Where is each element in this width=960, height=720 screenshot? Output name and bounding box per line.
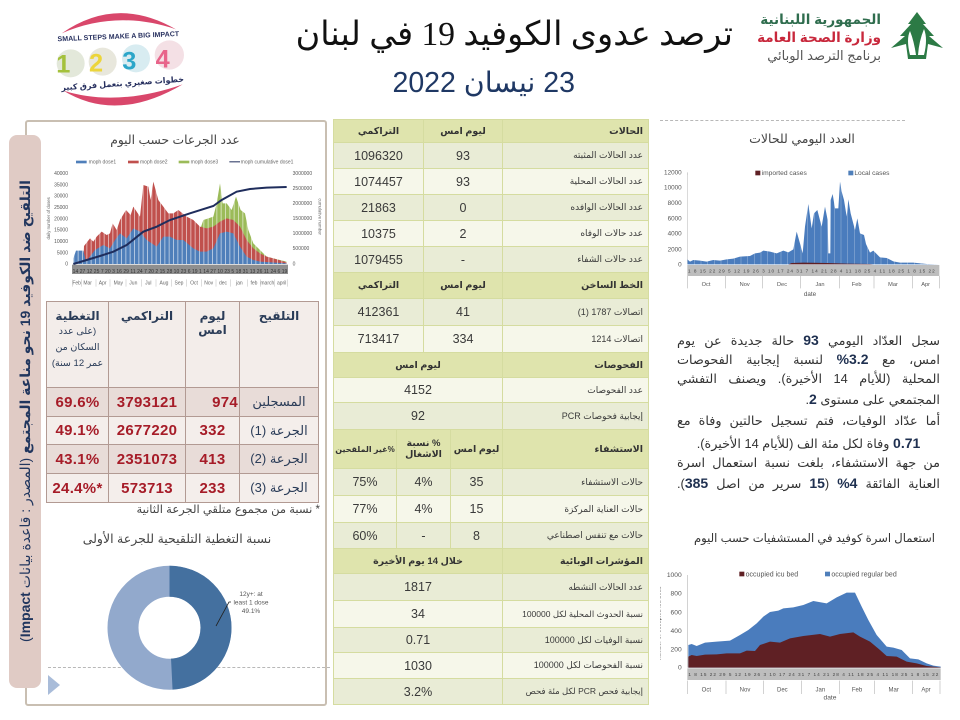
- chart: daily vaccine doses: daily number of doses: [46, 197, 51, 240]
- chart: first dose donut: 49.1%: [242, 608, 260, 615]
- paragraph lines: المجتمعي على مستوى 2.: [805, 391, 940, 407]
- table: indicators: الخط الساخن: [581, 280, 643, 291]
- chart: daily vaccine doses: 0: [65, 262, 68, 268]
- table: vaccination: 573713: [121, 480, 173, 496]
- chart: daily cases: [664, 169, 940, 298]
- table: indicators: ليوم امس: [454, 444, 499, 454]
- chart: first dose donut: [108, 566, 269, 690]
- table: indicators: ليوم امس: [440, 126, 486, 136]
- chart: daily vaccine doses: Sep: [175, 280, 184, 286]
- table: indicators: 35: [470, 475, 483, 489]
- table: indicators: 1030: [404, 658, 432, 672]
- chart: daily vaccine doses: march: [260, 280, 274, 286]
- table: indicators: 4%: [414, 475, 433, 489]
- table: indicators: 34: [411, 607, 425, 621]
- table: indicators: الاستشفاء: [595, 444, 643, 454]
- chart: occupied beds: 1 8 15 22 29 5 12 19 26 3 10 17 24 31 7 14 21 28 4 11 18 25 4 11 18 25 1 8 15 22: [688, 672, 939, 677]
- table: vaccination: التلقيح: [259, 309, 299, 323]
- chart: daily vaccine doses: cumulative number: [317, 198, 322, 236]
- logo: small steps campaign: 4: [156, 46, 170, 74]
- heading: daily cases: العدد اليومي للحالات: [749, 132, 855, 146]
- chart: daily cases: Dec: [777, 282, 787, 288]
- chart: daily vaccine doses: 20000: [54, 216, 68, 222]
- table: indicators: -: [421, 528, 426, 542]
- chart: daily cases: Apr: [921, 282, 930, 288]
- table: vaccination: الجرعة (3): [250, 480, 308, 495]
- chart: daily cases: 1 8 15 22 29 5 12 19 26 3 10 17 24 31 7 14 21 28 4 11 18 25 4 11 18 25 1 8 15 22: [688, 269, 935, 274]
- chart: daily vaccine doses: Nov: [204, 280, 214, 286]
- table: indicators: نسبة الوفيات لكل 100000: [545, 634, 643, 644]
- table: indicators: اتصالات 1787 (1): [578, 306, 643, 316]
- chart: daily vaccine doses: 35000: [54, 182, 68, 188]
- chart: daily vaccine doses: feb: [251, 280, 258, 286]
- footnote: * نسبة من مجموع متلقي الجرعة الثانية: [136, 504, 320, 516]
- chart: daily cases: 8000: [668, 200, 682, 207]
- table: vaccination: 3793121: [117, 394, 177, 410]
- chart: occupied beds: 1000: [667, 572, 682, 579]
- chart: occupied beds: Nov: [740, 687, 750, 693]
- chart: daily cases: 4000: [668, 231, 682, 238]
- table: vaccination: 233: [200, 480, 225, 496]
- table: indicators: 93: [456, 148, 470, 162]
- paragraph lines: امس، مع 3.2% لنسبة إيجابية الفحوصات: [677, 351, 940, 367]
- chart: occupied beds: Jan: [815, 687, 825, 693]
- table: indicators: 1079455: [354, 252, 403, 266]
- chart: occupied beds: [660, 571, 941, 701]
- table: indicators: 2: [460, 226, 466, 240]
- chart: daily vaccine doses: 10000: [54, 239, 68, 245]
- chart: daily vaccine doses: Aug: [160, 280, 169, 286]
- table: indicators: حالات مع تنفس اصطناعي: [547, 530, 643, 540]
- table: vaccination: 332: [200, 422, 225, 439]
- chart: daily cases: 6000: [668, 215, 682, 222]
- chart: daily vaccine doses: 0: [293, 262, 296, 268]
- table: indicators: 75%: [352, 475, 378, 489]
- table: vaccination: 49.1%: [55, 422, 100, 439]
- chart: daily vaccine doses: moph dose2: [140, 160, 168, 166]
- chart: daily vaccine doses: 30000: [54, 194, 68, 200]
- sidebar vertical heading: التلقيح ضد الكوفيد 19 نحو مناعة المجتمع (المصدر : قاعدة بيانات Impact ): [17, 180, 33, 642]
- table: indicators: 41: [456, 305, 470, 319]
- paragraph lines: أما عدّاد الوفيات، فتم تسجيل حالتين وفاة مع: [677, 413, 940, 428]
- heading: first dose coverage: نسبة التغطية التلقيحية للجرعة الأولى: [83, 532, 271, 546]
- chart: occupied beds: Dec: [777, 687, 788, 693]
- table: vaccination: التغطية: [55, 309, 100, 323]
- table: indicators: 93: [456, 174, 470, 188]
- chart: occupied beds: occupied regular bed: [831, 571, 897, 578]
- table: indicators: حالات العناية المركزة: [564, 504, 643, 514]
- table: indicators: 0.71: [406, 633, 430, 647]
- table: indicators: عدد الحالات المحلية: [570, 176, 643, 186]
- table: vaccination: 413: [200, 450, 225, 468]
- chart: daily vaccine doses: 500000: [293, 246, 310, 252]
- table: indicators: الحالات: [609, 126, 643, 136]
- chart: occupied beds: Oct: [702, 687, 711, 693]
- logo: ministry of public health: برنامج الترصد الوبائي: [767, 48, 881, 63]
- table: indicators: اتصالات 1214: [591, 334, 643, 344]
- chart: occupied beds: 0: [678, 665, 682, 672]
- table: indicators: الفحوصات: [594, 360, 643, 370]
- table: indicators: 4%: [414, 502, 433, 516]
- table: indicators: عدد الحالات النشطه: [568, 582, 643, 592]
- table: indicators: ليوم امس: [395, 360, 441, 370]
- chart: daily vaccine doses: 2500000: [293, 186, 312, 192]
- table: indicators: 1096320: [354, 148, 403, 162]
- heading: covid bed use: استعمال اسرة كوفيد في المستشفيات حسب اليوم: [694, 532, 935, 545]
- chart: first dose donut: 12y+: at: [239, 591, 263, 598]
- table: indicators: نسبة الفحوصات لكل 100000: [534, 660, 643, 670]
- table: indicators: 0: [460, 200, 466, 214]
- table: indicators: عدد الحالات الوافده: [570, 202, 643, 212]
- table: indicators: حالات الاستشفاء: [581, 476, 643, 486]
- panel: vaccination sidebar: [9, 135, 41, 688]
- chart: daily cases: imported cases: [762, 170, 807, 177]
- chart: daily vaccine doses: jan: [235, 280, 243, 286]
- logo: small steps campaign: 3: [122, 47, 136, 75]
- date subtitle: 23 نيسان 2022: [392, 67, 575, 99]
- table: indicators: التراكمي: [358, 126, 399, 136]
- table: vaccination: 43.1%: [55, 450, 100, 468]
- table: vaccination: 24.4%*: [52, 480, 103, 496]
- chart: daily vaccine doses: april: [277, 280, 286, 286]
- table: indicators: 15: [470, 502, 483, 516]
- table: indicators: 1074457: [354, 174, 403, 188]
- chart: daily cases: Nov: [740, 282, 750, 288]
- chart: daily vaccine doses: 1000000: [293, 231, 312, 237]
- chart: daily vaccine doses: 1500000: [293, 216, 312, 222]
- table: vaccination: 974: [212, 394, 238, 410]
- chart: daily vaccine doses: Oct: [190, 280, 198, 286]
- chart: daily vaccine doses: 5000: [57, 250, 68, 256]
- chart: daily vaccine doses: [46, 160, 322, 287]
- chart: daily vaccine doses: 3000000: [293, 171, 312, 177]
- table: indicators: % نسبة الاشغال: [405, 438, 442, 460]
- chart: first dose donut: least 1 dose: [233, 600, 269, 606]
- table: indicators: عدد حالات الشفاء: [577, 254, 643, 264]
- chart: daily vaccine doses: dec: [219, 280, 228, 286]
- chart: occupied beds: 400: [671, 628, 682, 635]
- table: indicators: نسبة الحدوث المحلية لكل 100000: [522, 608, 643, 618]
- chart: daily vaccine doses: moph cumulative dose1: [241, 160, 294, 166]
- logo: small steps campaign: [56, 13, 185, 106]
- logo: ministry of public health: وزارة الصحة العامة: [757, 30, 881, 45]
- chart: daily vaccine doses: moph dose3: [191, 160, 218, 166]
- chart: daily vaccine doses: Mar: [83, 280, 92, 286]
- chart: occupied beds: Apr: [921, 687, 931, 693]
- logo: small steps campaign: 2: [89, 50, 103, 78]
- table: vaccination: الجرعة (2): [250, 451, 308, 466]
- dashed divider top: [660, 120, 905, 121]
- chart: daily cases: date: [804, 291, 817, 298]
- paragraph lines: من جهة الاستشفاء، بلغت نسبة استعمال اسرة: [677, 455, 940, 470]
- chart: daily cases: Mar: [888, 282, 898, 288]
- chart: daily vaccine doses: 15000: [54, 228, 68, 234]
- table: vaccination: 2351073: [117, 450, 177, 468]
- chart: daily cases: 0: [678, 262, 682, 269]
- panel: vaccination frame: [25, 120, 327, 706]
- chart: daily vaccine doses: moph dose1: [89, 160, 116, 166]
- table: indicators: [333, 119, 649, 705]
- chart: daily vaccine doses: May: [114, 280, 124, 286]
- table: indicators: 60%: [352, 528, 378, 542]
- text block: daily summary: [677, 332, 940, 492]
- table: indicators: عدد الحالات المثبته: [573, 150, 643, 160]
- chart: occupied beds: 200: [671, 647, 682, 654]
- chart: daily vaccine doses: Jul: [145, 280, 152, 286]
- chart: daily vaccine doses: 25000: [54, 205, 68, 211]
- logo: small steps campaign: SMALL STEPS MAKE A BIG IMPACT: [57, 31, 180, 43]
- table: indicators: عدد الفحوصات: [587, 384, 643, 394]
- chart: occupied beds: 600: [671, 609, 682, 616]
- chart: daily vaccine doses: Jun: [129, 280, 138, 286]
- paragraph lines: سجل العدّاد اليومي 93 حالة جديدة عن يوم: [677, 332, 940, 348]
- table: vaccination: ليوم امس: [198, 309, 227, 337]
- table: vaccination: [46, 301, 319, 503]
- logo: ministry of public health: الجمهورية اللبنانية: [760, 12, 881, 27]
- table: vaccination: التراكمي: [121, 309, 173, 323]
- table: indicators: 21863: [361, 200, 396, 214]
- chart: daily vaccine doses: 40000: [54, 171, 68, 177]
- chart: occupied beds: occupied icu bed: [746, 571, 798, 578]
- table: indicators: 713417: [358, 332, 399, 346]
- chart: daily cases: Feb: [852, 282, 862, 288]
- chart: daily cases: 2000: [668, 246, 682, 253]
- paragraph lines: العناية الفائقة 4% (15 سرير من اصل 385).: [677, 475, 940, 491]
- table: indicators: 8: [473, 528, 480, 542]
- table: vaccination: 69.6%: [55, 394, 100, 410]
- table: indicators: إيجابية فحوصات PCR: [562, 410, 643, 420]
- table: indicators: عدد حالات الوفاه: [580, 228, 643, 238]
- table: indicators: ليوم امس: [440, 280, 486, 291]
- chart: daily cases: Jan: [815, 282, 825, 288]
- table: indicators: التراكمي: [358, 280, 399, 291]
- table: indicators: إيجابية فحص PCR لكل مئة فحص: [526, 686, 643, 696]
- title: ترصد عدوى الكوفيد 19 في لبنان: [296, 16, 733, 53]
- dashed divider lower: [48, 667, 330, 668]
- table: indicators: المؤشرات الوبائية: [560, 556, 643, 566]
- table: indicators: %غير الملقحين: [335, 444, 395, 454]
- chart: daily cases: 12000: [664, 169, 682, 176]
- table: vaccination: المسجلين: [252, 394, 306, 409]
- table: indicators: 412361: [358, 305, 399, 319]
- logo: small steps campaign: خطوات صغيري بتعمل فرق كبير: [60, 75, 185, 92]
- chart: occupied beds: Feb: [852, 687, 863, 693]
- logo: small steps campaign: 1: [56, 51, 70, 79]
- table: indicators: 77%: [352, 502, 378, 516]
- chart: occupied beds: 800: [671, 591, 682, 598]
- table: indicators: 334: [453, 332, 473, 346]
- table: vaccination: 2677220: [117, 422, 177, 439]
- paragraph lines: 0.71 وفاة لكل مئة الف (للأيام 14 الأخيرة).: [697, 435, 920, 451]
- table: indicators: خلال 14 يوم الأخيرة: [373, 556, 463, 566]
- chart: daily cases: Oct: [702, 282, 711, 288]
- chart: daily vaccine doses: 14 27 12 25 7 20 3 16 29 11 24 7 20 2 15 28 10 23 6 19 1 14 27 10 23 5 18 31 13 26 11 24 6 19: [73, 269, 288, 275]
- table: vaccination: (على عدد السكان من عمر 12 سنة): [52, 326, 103, 369]
- paragraph lines: المحلية (للأيام 14 الأخيرة). ويصنف التفشي: [677, 371, 940, 386]
- chart: daily vaccine doses: Apr: [99, 280, 107, 286]
- heading: doses per day: عدد الجرعات حسب اليوم: [110, 133, 240, 147]
- chart: occupied beds: Mar: [888, 687, 899, 693]
- table: indicators: 92: [411, 409, 425, 423]
- table: indicators: 3.2%: [404, 684, 432, 698]
- table: indicators: 10375: [361, 226, 396, 240]
- table: indicators: 1817: [404, 580, 432, 594]
- chart: occupied beds: date: [824, 694, 837, 701]
- table: indicators: 4152: [404, 383, 432, 397]
- table: indicators: -: [461, 252, 465, 266]
- chart: daily cases: 10000: [664, 185, 682, 192]
- logo: ministry of public health: [757, 12, 943, 64]
- chart: daily vaccine doses: 2000000: [293, 201, 312, 207]
- arrow: next-page triangle: [48, 675, 60, 695]
- table: vaccination: الجرعة (1): [250, 422, 308, 438]
- chart: daily cases: Local cases: [854, 170, 890, 177]
- chart: daily vaccine doses: Feb: [72, 280, 81, 286]
